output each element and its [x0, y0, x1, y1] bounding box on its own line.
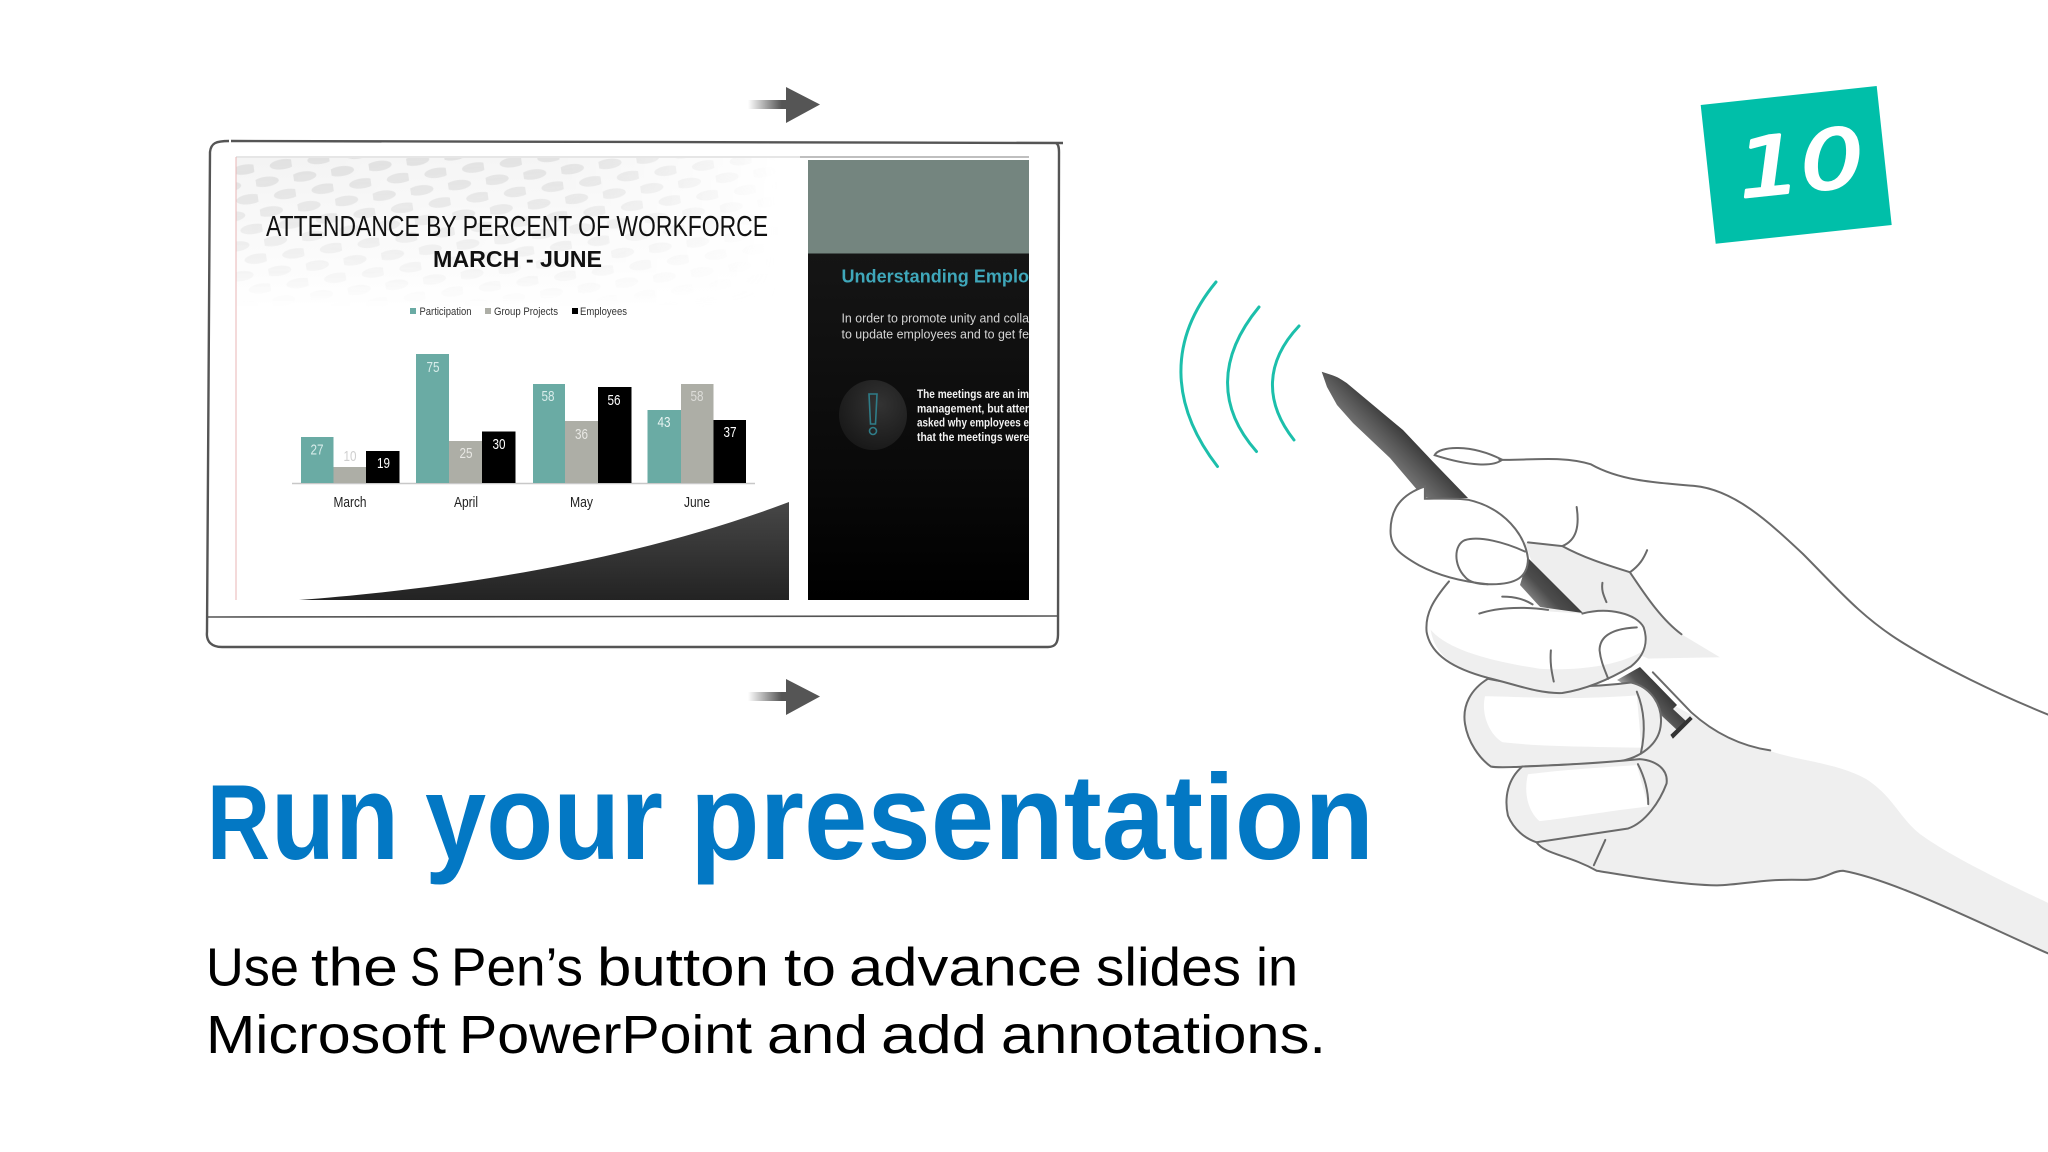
- description: button: [597, 938, 769, 998]
- next slide panel: [808, 160, 1030, 600]
- panel body text: to update employees and to get fe: [842, 326, 1029, 342]
- chart legend: Participation: [420, 306, 472, 318]
- S Pen: [1322, 372, 1692, 738]
- knuckle lines: [1528, 507, 1681, 634]
- description: slides: [1096, 938, 1241, 998]
- bar chart: 58: [690, 388, 704, 405]
- description: and: [767, 1005, 868, 1065]
- description: advance: [849, 938, 1082, 998]
- panel callout text: management, but atter: [917, 404, 1029, 416]
- bar chart: 37: [724, 424, 736, 441]
- bar chart: May: [570, 494, 593, 511]
- description: S: [410, 938, 440, 998]
- description: PowerPoint: [459, 1005, 752, 1065]
- description: the: [311, 938, 398, 998]
- bar chart: June: [684, 494, 710, 511]
- bar chart: [292, 354, 755, 511]
- bar chart: 25: [460, 445, 472, 462]
- dark wedge shape: [299, 502, 789, 600]
- panel body text: In order to promote unity and colla: [842, 310, 1030, 326]
- title: un: [271, 749, 399, 885]
- number badge: 10: [1733, 111, 1868, 216]
- thumb nail: [1435, 448, 1502, 464]
- bar chart: 19: [377, 455, 390, 472]
- bar chart: 10: [344, 448, 356, 465]
- title: R: [207, 762, 270, 882]
- slide subtitle: MARCH - JUNE: [433, 246, 602, 272]
- bar chart: 75: [426, 359, 440, 376]
- panel callout text: asked why employees e: [917, 418, 1029, 430]
- description: [206, 938, 1326, 1065]
- panel heading: Understanding Emplo: [842, 266, 1029, 286]
- little finger: [1506, 759, 1667, 842]
- panel callout text: that the meetings were: [917, 432, 1029, 444]
- bar chart: 58: [542, 388, 554, 405]
- index finger: [1391, 486, 1528, 584]
- exclamation icon: [839, 380, 907, 450]
- top arrow: [748, 87, 820, 123]
- presentation slide: attendance chart: [236, 157, 1029, 600]
- description: add: [881, 1005, 987, 1065]
- wrist and lower hand: [1653, 672, 1770, 750]
- panel body text: [842, 310, 1030, 342]
- middle finger: [1426, 581, 1646, 693]
- ring finger: [1464, 679, 1661, 767]
- bottom arrow: [748, 679, 820, 715]
- chart legend: [410, 306, 627, 318]
- chart legend: Group Projects: [494, 306, 558, 318]
- back of hand: [1499, 459, 2048, 715]
- number badge: [1701, 86, 1892, 244]
- bar chart: 30: [492, 436, 506, 453]
- panel callout text: [917, 389, 1029, 444]
- description: Microsoft: [206, 1005, 446, 1065]
- slide title: ATTENDANCE BY PERCENT OF WORKFORCE: [266, 211, 768, 243]
- hand outlines: [1391, 448, 2048, 953]
- chart legend: Employees: [580, 306, 627, 318]
- panel callout text: The meetings are an im: [917, 389, 1029, 401]
- title: your: [425, 749, 663, 885]
- bar chart: March: [334, 494, 366, 511]
- description: Pen’s: [451, 938, 583, 998]
- bar chart: 43: [658, 414, 670, 431]
- title: presentation: [690, 749, 1374, 885]
- sketched device frame: [207, 141, 1063, 647]
- bar chart: April: [454, 494, 478, 511]
- description: to: [784, 938, 836, 998]
- bar chart: 27: [310, 442, 324, 458]
- description: in: [1256, 938, 1298, 998]
- signal waves: [1181, 282, 1299, 466]
- description: annotations.: [1001, 1005, 1326, 1065]
- bar chart: 56: [608, 392, 620, 409]
- hand shading: [1525, 542, 2048, 953]
- description: Use: [206, 938, 299, 998]
- bar chart: 36: [575, 426, 588, 443]
